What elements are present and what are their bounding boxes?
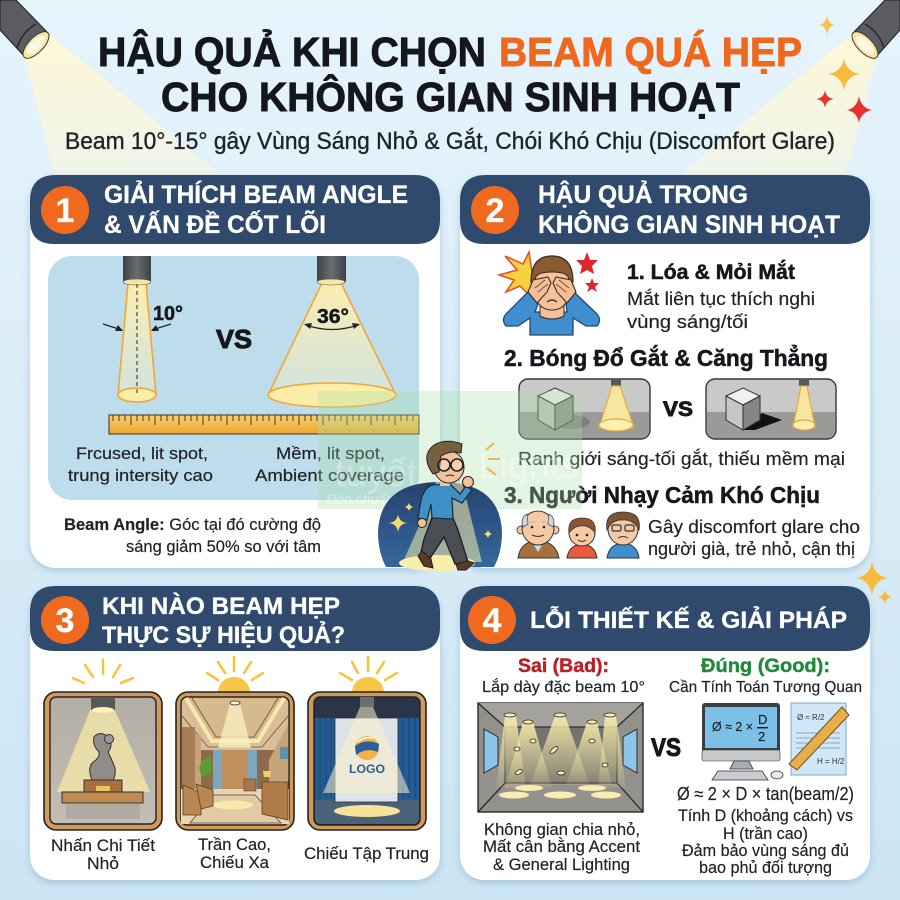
watermark: tuyết xyxy=(335,453,418,495)
bad explanation xyxy=(483,820,640,874)
ruler xyxy=(109,415,419,434)
illustration: paper and ruler: H = H/2 xyxy=(817,757,845,766)
item 2 heading: 2. Bóng Đổ Gắt & Căng Thẳng xyxy=(504,343,828,371)
character legs xyxy=(418,518,474,570)
character head xyxy=(427,441,464,486)
panel 1 header: & VẤN ĐỀ CỐT LÕI xyxy=(104,209,326,239)
title: HẬU QUẢ KHI CHỌN xyxy=(98,29,486,75)
VS label: VS xyxy=(651,734,681,762)
good heading: Đúng (Good): xyxy=(701,656,830,677)
panel 4: design mistakes and solutions xyxy=(460,586,870,880)
panel 1: beam angle xyxy=(30,175,440,568)
panel 1 header: GIẢI THÍCH BEAM ANGLE xyxy=(104,179,408,209)
icon: elderly person xyxy=(517,511,559,558)
character torso and arms xyxy=(418,476,474,528)
caption: narrow beam: Frcused, lit spot, xyxy=(76,444,208,463)
scene: stage logo: LOGO xyxy=(349,762,385,776)
scene: high ceiling lobby xyxy=(176,657,294,830)
caption: narrow beam: trung intersity cao xyxy=(68,466,213,485)
decorative stars lower right xyxy=(856,561,892,604)
panel 3: when narrow beam works xyxy=(30,586,440,880)
caption: sculpture: Nhấn Chi Tiết xyxy=(51,836,155,855)
illustration: room with many narrow beams xyxy=(478,703,643,812)
caption: lobby: Trần Cao, xyxy=(198,835,271,854)
panel 3 header: 3 xyxy=(56,602,74,640)
narrow beam 10 degrees xyxy=(103,256,183,402)
panel 2 header: KHÔNG GIAN SINH HOẠT xyxy=(538,209,840,239)
item 3 heading: 3. Người Nhạy Cảm Khó Chịu xyxy=(504,482,820,508)
soft shadow scene xyxy=(519,379,650,439)
panel 2 header: HẬU QUẢ TRONG xyxy=(538,179,748,209)
illustration: paper and ruler xyxy=(789,703,849,775)
beam angle definition xyxy=(64,515,321,556)
item 1 description xyxy=(627,288,815,332)
icon: right spotlight xyxy=(676,0,900,178)
item 3 description xyxy=(648,517,860,559)
title xyxy=(98,29,802,120)
panel 4 header: LỖI THIẾT KẾ & GIẢI PHÁP xyxy=(530,605,847,634)
character walking in spotlight xyxy=(378,441,502,571)
panel 2: consequences xyxy=(460,175,870,568)
panel 4 header: 4 xyxy=(483,602,502,640)
good explanation: bao phủ đối tượng xyxy=(699,858,832,877)
hard shadow scene xyxy=(706,379,836,439)
item 1 heading: 1. Lóa & Mỏi Mắt xyxy=(627,260,795,284)
panel 4 header xyxy=(460,586,870,651)
item 3 description: người già, trẻ nhỏ, cận thị xyxy=(648,539,855,559)
subtitle: Beam 10°-15° gây Vùng Sáng Nhỏ & Gắt, Chói Khó Chịu (Discomfort Glare) xyxy=(65,128,835,155)
illustration: paper and ruler: Ø ≈ R/2 xyxy=(797,713,825,722)
bad explanation: Mất cân bằng Accent xyxy=(483,837,640,856)
beam angle definition: sáng giảm 50% so với tâm xyxy=(126,537,321,556)
good subheading: Cần Tính Toán Tương Quan xyxy=(669,679,862,696)
watermark xyxy=(318,391,582,509)
title: BEAM QUÁ HẸP xyxy=(499,29,802,75)
panel 2 header: 2 xyxy=(486,192,504,230)
bad explanation: & General Lighting xyxy=(493,855,630,874)
caption: wide beam xyxy=(255,444,404,485)
watermark: Đèn chuẩn Kỹ thuật xyxy=(326,491,450,507)
title: CHO KHÔNG GIAN SINH HOẠT xyxy=(161,74,740,120)
item 1 description: vùng sáng/tối xyxy=(627,312,748,332)
caption: narrow beam xyxy=(68,444,213,485)
illustration: computer with formula: D xyxy=(758,712,767,727)
caption: stage: Chiếu Tập Trung xyxy=(304,844,429,863)
illustration: computer with formula: Ø ≈ 2 × xyxy=(712,719,753,734)
bad heading: Sai (Bad): xyxy=(518,656,609,677)
VS label: VS xyxy=(663,398,693,421)
good explanation: Tính D (khoảng cách) vs xyxy=(678,806,853,825)
item 1 description: Mắt liên tục thích nghi xyxy=(627,288,815,309)
icon: child xyxy=(567,518,597,558)
formula: Ø ≈ 2 × D × tan(beam/2) xyxy=(677,784,854,804)
wide beam 36 degrees xyxy=(268,256,396,407)
panel 3 header xyxy=(30,586,440,651)
good explanation xyxy=(678,806,853,877)
icon: left spotlight xyxy=(0,0,225,178)
good explanation: Đảm bảo vùng sáng đủ xyxy=(682,841,849,860)
VS label: VS xyxy=(216,324,252,354)
scene: stage logo xyxy=(308,657,426,830)
caption: wide beam: Ambient coverage xyxy=(255,466,404,485)
narrow beam 10 degrees: 10° xyxy=(153,303,183,325)
caption: wide beam: Mềm, lit spot, xyxy=(276,444,385,463)
illustration: computer with formula: 2 xyxy=(758,729,765,744)
decorative stars top right xyxy=(816,15,872,123)
item 2 description: Ranh giới sáng-tối gắt, thiếu mềm mại xyxy=(518,448,845,469)
panel 3 header: THỰC SỰ HIỆU QUẢ? xyxy=(102,620,345,649)
bad explanation: Không gian chia nhỏ, xyxy=(484,820,640,839)
panel 3 header: KHI NÀO BEAM HẸP xyxy=(102,592,340,620)
illustration: computer with formula xyxy=(702,703,783,780)
scene: sculpture accent xyxy=(44,660,162,830)
good explanation: H (trần cao) xyxy=(723,824,808,843)
panel 1 header: 1 xyxy=(56,192,74,230)
wide beam 36 degrees: 36° xyxy=(317,306,349,328)
item 3 description: Gây discomfort glare cho xyxy=(648,517,860,537)
icon: person with glasses xyxy=(607,512,639,558)
caption: lobby xyxy=(198,835,271,872)
panel 1 header xyxy=(30,175,440,244)
caption: lobby: Chiếu Xa xyxy=(200,853,270,872)
caption: sculpture: Nhỏ xyxy=(87,854,119,873)
panel 2 header xyxy=(460,175,870,244)
beam comparison diagram xyxy=(48,256,419,500)
watermark: Lights xyxy=(478,445,579,487)
beam angle definition: Beam Angle: Góc tại đó cường độ xyxy=(64,515,321,534)
caption: sculpture xyxy=(51,836,155,873)
icon: person covering eyes xyxy=(499,252,600,335)
bad subheading: Lắp dày đặc beam 10° xyxy=(482,677,645,696)
